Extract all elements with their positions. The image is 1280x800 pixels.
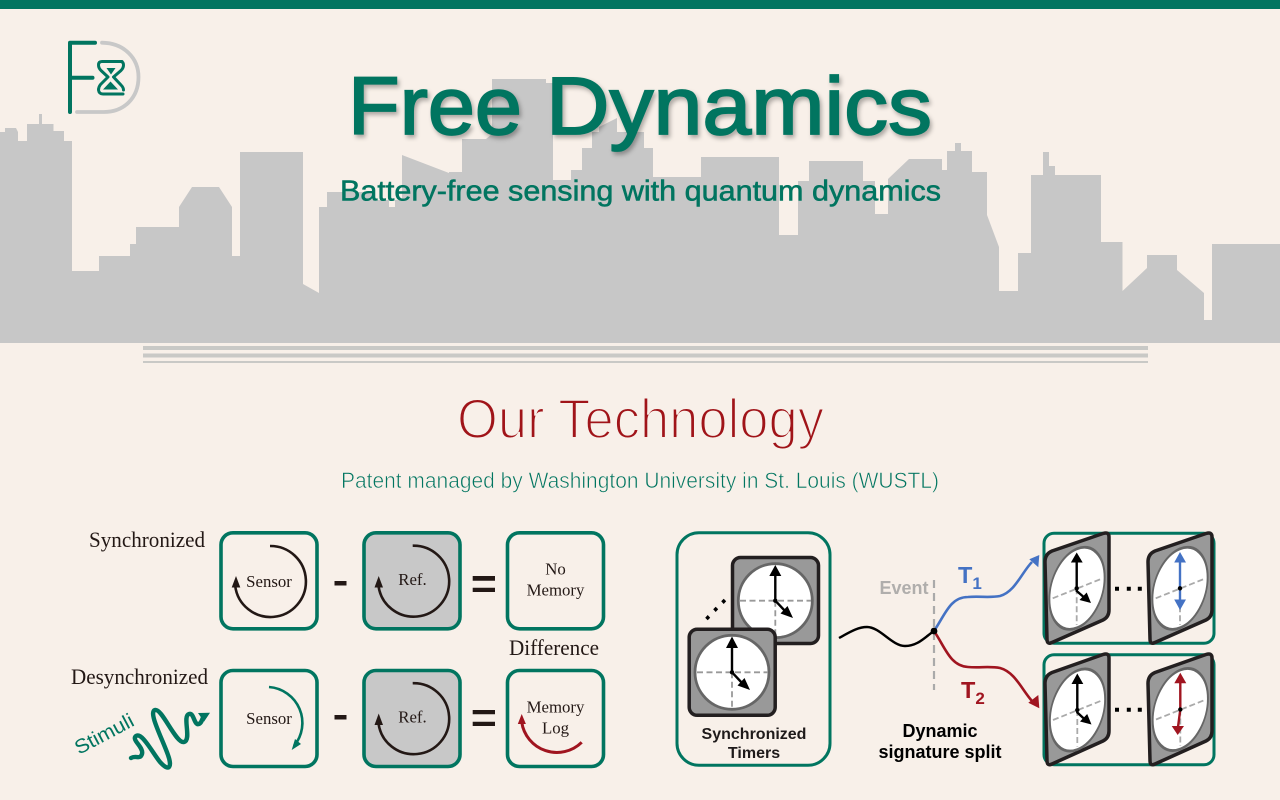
clock: back timer (732, 558, 818, 644)
label: T1: 1 (972, 574, 982, 593)
logo: letter F (70, 43, 95, 112)
result box: memory log (508, 670, 604, 766)
label: desynchronized: Desynchronized (71, 664, 208, 689)
chart: dynamic signature split (839, 555, 1039, 762)
sensor box synchronized (221, 533, 317, 629)
minus sign bottom (334, 715, 346, 720)
ellipsis (1115, 587, 1142, 591)
reference box bottom: Ref. (398, 708, 427, 726)
timers frame (677, 533, 830, 765)
minus sign top (334, 581, 346, 586)
city skyline silhouette (0, 79, 1280, 343)
input signal wave (839, 627, 934, 646)
label: synchronized: Synchronized (89, 527, 205, 552)
result box: no memory (508, 533, 604, 629)
top bar (0, 0, 1280, 9)
logo: hourglass (98, 62, 124, 94)
label: timers: Timers (728, 745, 780, 762)
result box: memory log: Log (542, 718, 570, 738)
dots between timers (705, 599, 726, 620)
clock: tilted top right blue (1148, 533, 1212, 643)
label: difference: Difference (509, 635, 599, 660)
sensor box synchronized: Sensor (246, 572, 292, 591)
event point (931, 628, 937, 634)
clock: tilted bottom right red (1148, 654, 1212, 765)
ellipsis (1115, 708, 1142, 712)
reference box bottom (364, 670, 460, 766)
result box: no memory: No (545, 560, 566, 578)
label: T2: T (961, 677, 975, 703)
stimuli label: Stimuli (71, 710, 138, 759)
panel: T1 outcome (1044, 533, 1214, 643)
result box: memory log: Memory (527, 698, 585, 716)
reference box top (364, 533, 460, 629)
logo: FD hourglass (70, 43, 138, 112)
equals sign bottom (473, 710, 495, 726)
title (348, 61, 932, 152)
panel: memory equation (71, 527, 604, 768)
icon: stimuli wave arrow (131, 710, 210, 768)
label: T1: T (958, 562, 972, 588)
title: Dynamics (546, 61, 932, 152)
label: dynamic: Dynamic (902, 721, 978, 741)
logo: hourglass sand (103, 68, 118, 90)
label: T2: 2 (975, 689, 985, 708)
label: synchronized timers: Synchronized (702, 726, 806, 743)
equals sign top (473, 576, 495, 592)
title: Free (348, 61, 522, 152)
frame top (1044, 533, 1214, 643)
clock: tilted bottom left (1045, 654, 1109, 765)
frame bottom (1044, 655, 1214, 765)
result box: no memory: Memory (527, 580, 585, 600)
subtitle: Battery-free sensing with quantum dynamics (340, 176, 941, 208)
label: event: Event (880, 578, 929, 598)
sensor box desynchronized: Sensor (246, 709, 292, 728)
arrow: blue branch (934, 555, 1039, 631)
section heading: Our Technology (457, 387, 824, 450)
arrow: red branch (934, 631, 1039, 708)
divider stripes (143, 346, 1148, 363)
label: signature split: signature split (878, 742, 1002, 762)
logo: letter D (77, 43, 138, 112)
clock: front timer (689, 629, 775, 715)
event marker line (933, 580, 935, 690)
sensor box desynchronized (221, 670, 317, 766)
patent note: Patent managed by Washington University in St. Louis (WUSTL) (341, 468, 939, 493)
clock: tilted top left (1045, 533, 1109, 643)
reference box top: Ref. (398, 570, 427, 589)
panel: T2 outcome (1044, 654, 1214, 765)
panel: synchronized timers (677, 533, 830, 765)
